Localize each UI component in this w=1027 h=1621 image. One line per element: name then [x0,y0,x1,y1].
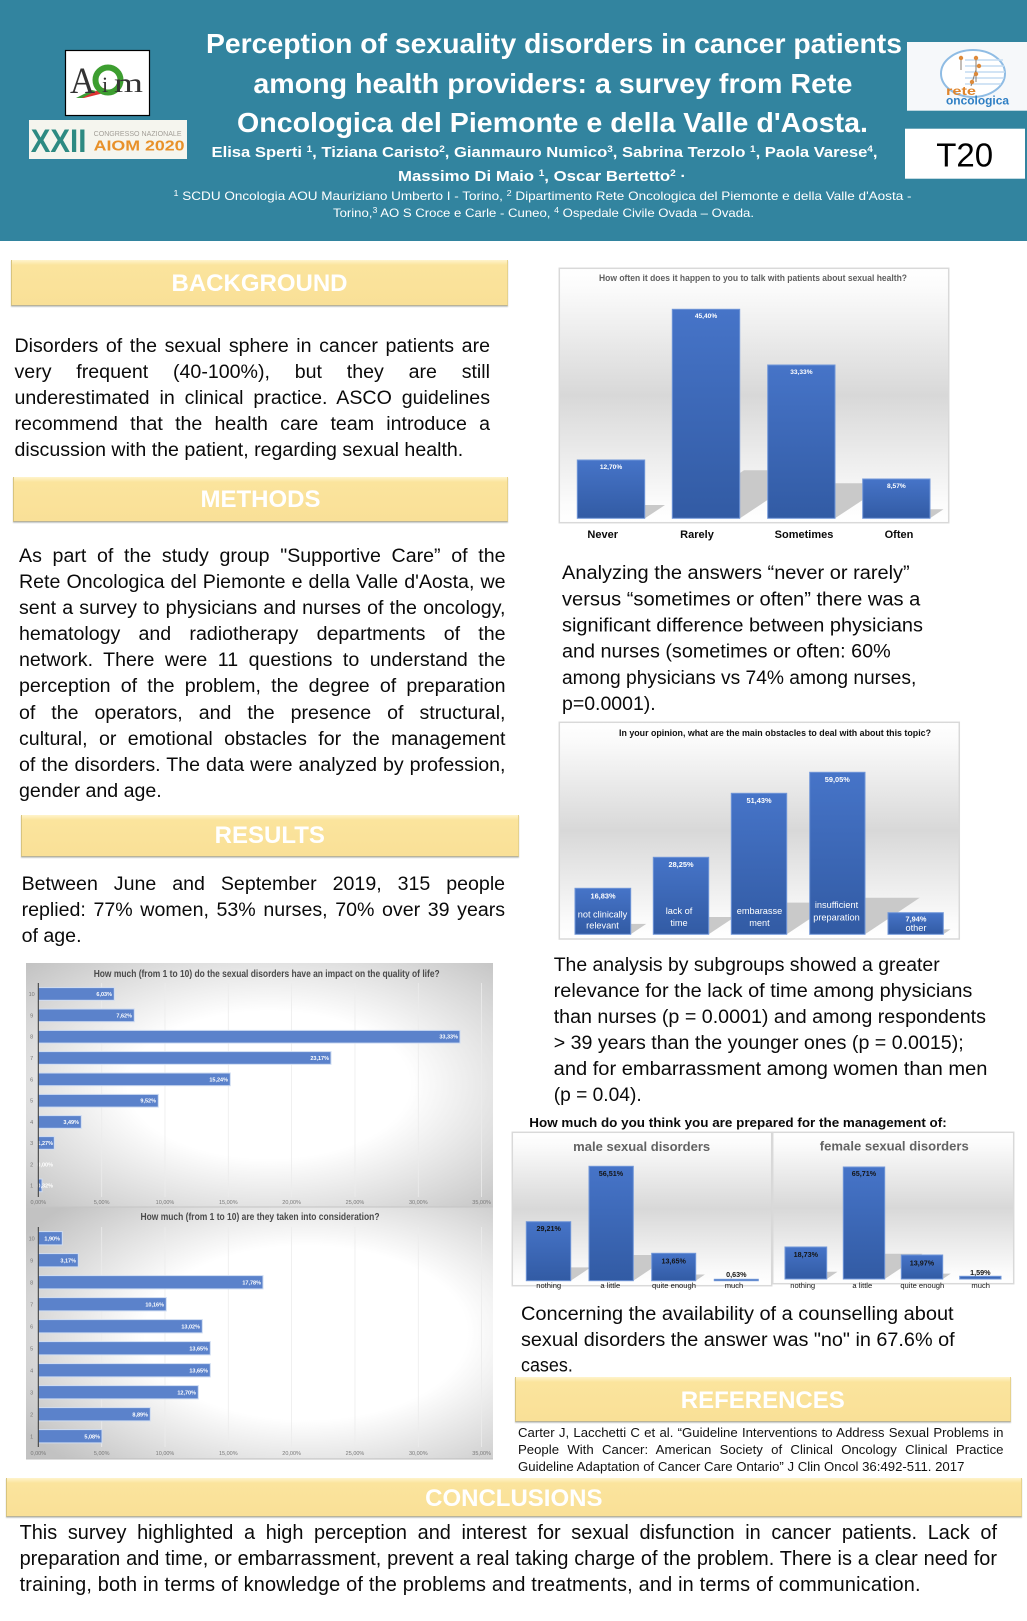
chart: male sexual disorders: male sexual disorders [573,1140,710,1154]
chart: main obstacles: 16,83% [590,891,616,900]
chart: how often talk about sexual health: 45,40% [695,313,717,320]
text: subgroup analysis [554,954,987,1106]
chart: taken into consideration: 13,65% [189,1368,208,1374]
text: never or rarely analysis: and nurses (sometimes or often: 60% [562,641,891,663]
logo: rete oncologica: oncologica [946,94,1009,108]
chart: female sexual disorders [773,1132,1014,1290]
chart: how often talk about sexual health [559,268,949,541]
chart: impact on quality of life: How much (from 1 to 10) do the sexual disorders have an impact on the quality of life? [94,969,440,980]
chart: female sexual disorders: a little [852,1281,872,1290]
chart: impact on quality of life: 3,49% [63,1120,79,1126]
authors: , [873,144,878,161]
text: background: very frequent (40-100%), but they are still [14,361,490,383]
logo: AIOM: A [70,61,95,102]
chart: taken into consideration: 5,00% [94,1451,110,1457]
heading: results: RESULTS [215,822,325,849]
chart: how often talk about sexual health: 33,33% [790,369,813,376]
authors: , Sabrina Terzolo [613,144,750,161]
heading: background: BACKGROUND [172,270,348,297]
text: never or rarely analysis: Analyzing the answers “never or rarely” [562,562,910,584]
chart: impact on quality of life: 0,32% [37,1183,53,1189]
authors: 1 [539,168,544,178]
chart: impact on quality of life: 2 [30,1162,33,1168]
chart: male sexual disorders: much [725,1281,743,1290]
chart: impact on quality of life: 23,17% [310,1056,329,1062]
text: never or rarely analysis: p=0.0001). [562,693,656,715]
text: methods: sent a survey to physicians and nurses of the oncology, [19,597,506,619]
authors: 1 [307,144,312,154]
logo: AIOM [66,50,150,116]
chart: female sexual disorders: female sexual disorders [820,1140,969,1154]
chart: impact on quality of life: 0,00% [30,1200,46,1206]
chart: impact on quality of life [26,963,493,1207]
chart: female sexual disorders: much [971,1281,990,1290]
chart: taken into consideration: 13,02% [181,1324,200,1330]
chart: main obstacles: insufficient [815,900,859,910]
chart: main obstacles: 59,05% [825,775,850,784]
authors: 3 [607,144,613,154]
chart: main obstacles: not clinically [578,909,628,919]
text: subgroup analysis: The analysis by subgroups showed a greater [554,954,940,976]
chart: how often talk about sexual health: Sometimes [775,529,833,541]
chart: male sexual disorders: 29,21% [537,1224,561,1233]
chart: main obstacles: ment [749,918,770,928]
text: subgroup analysis: relevance for the lack of time among physicians [554,980,973,1002]
title: Oncologica del Piemonte e della Valle d'Aosta. [237,107,868,138]
text: methods: As part of the study group "Supportive Care” of the [19,545,506,567]
text: methods: cultural, or emotional obstacles for the management [19,728,506,750]
text: never or rarely analysis [562,562,923,715]
authors: · [676,168,686,185]
chart: taken into consideration: 1 [30,1434,33,1440]
chart: impact on quality of life: 7 [30,1056,33,1062]
title: Perception of sexuality disorders in cancer patients [206,28,902,59]
text: methods: hematology and radiotherapy departments of the [19,623,506,645]
chart: female sexual disorders: nothing [790,1281,815,1290]
text: methods: perception of the problem, the degree of preparation [19,675,506,697]
chart: taken into consideration [26,1207,493,1459]
chart: main obstacles: other [906,923,926,933]
chart: main obstacles: preparation [813,912,860,922]
chart: impact on quality of life: 8 [30,1035,33,1041]
chart: taken into consideration: 15,00% [219,1451,238,1457]
affiliations: Torino, [333,206,369,220]
text: counselling availability: cases. [521,1355,573,1377]
chart: male sexual disorders: 0,63% [726,1270,747,1279]
chart: taken into consideration: 20,00% [282,1451,301,1457]
heading: results [21,815,519,857]
text: subgroup analysis: > 39 years than the younger ones (p = 0.0015); [554,1032,964,1054]
chart: female sexual disorders: 65,71% [852,1169,877,1178]
chart: taken into consideration: 12,70% [177,1390,196,1396]
chart: main obstacles: 28,25% [668,860,694,869]
chart: impact on quality of life: 35,00% [472,1200,491,1206]
chart: male sexual disorders: quite enough [652,1281,696,1290]
authors: Massimo Di Maio [398,168,520,185]
chart: impact on quality of life: 25,00% [346,1200,364,1206]
chart: taken into consideration: 5 [30,1346,33,1352]
text: conclusions [20,1522,998,1596]
text: references: Guideline Adaptation of Cancer Care Ontario” J Clin Oncol 36:492-511. 2017 [518,1459,964,1474]
chart: taken into consideration: 4 [30,1368,33,1374]
text: results: Between June and September 2019, 315 people [22,873,505,895]
text: references: Carter J, Lacchetti C et al. “Guideline Interventions to Address Sexual Problems in [518,1425,1004,1440]
chart: taken into consideration: 10,00% [156,1451,174,1457]
chart: taken into consideration: 10,16% [145,1302,164,1308]
heading: methods [13,477,508,522]
chart: impact on quality of life: 5 [30,1099,33,1105]
chart: impact on quality of life: 15,00% [219,1200,238,1206]
authors: , Oscar Bertetto [544,168,670,185]
heading: references: REFERENCES [681,1387,845,1414]
chart: impact on quality of life: 3 [30,1141,33,1147]
chart: how often talk about sexual health: How often it does it happen to you to talk with patients about sexual health? [599,273,907,283]
chart: how often talk about sexual health: 12,70% [600,464,622,471]
chart: main obstacles: time [670,918,688,928]
chart: male sexual disorders: 13,65% [662,1256,686,1265]
chart: female sexual disorders: 18,73% [794,1250,819,1259]
text: background: Disorders of the sexual sphere in cancer patients are [14,335,490,357]
heading: conclusions [6,1478,1022,1517]
affiliations: 1 [174,189,179,198]
text: methods: of the disorders. The data were analyzed by profession, [19,754,506,776]
text: counselling availability [521,1303,955,1377]
chart: taken into consideration: 13,65% [189,1346,208,1352]
chart: impact on quality of life: 6 [30,1077,33,1083]
text: never or rarely analysis: among physicians vs 74% among nurses, [562,667,916,689]
text: methods [19,545,506,802]
chart: how often talk about sexual health: 8,57% [887,483,906,490]
chart: main obstacles: In your opinion, what are the main obstacles to deal with about this topic? [619,728,931,738]
chart: main obstacles: 7,94% [906,915,927,924]
chart: taken into consideration: 30,00% [409,1451,428,1457]
chart: female sexual disorders: 13,97% [910,1258,935,1267]
chart: taken into consideration: 25,00% [346,1451,364,1457]
chart: main obstacles: lack of [666,906,693,916]
chart: impact on quality of life: 10 [29,992,35,998]
chart: how often talk about sexual health: Never [587,529,619,541]
affiliations: Ospedale Civile Ovada – Ovada. [559,206,754,220]
chart: taken into consideration: 9 [30,1258,33,1264]
affiliations: Dipartimento Rete Oncologica del Piemonte e della Valle d'Aosta - [512,189,912,203]
chart: impact on quality of life: 1 [30,1183,33,1189]
chart: how often talk about sexual health: Often [885,529,914,541]
text: results: replied: 77% women, 53% nurses, 70% over 39 years [22,899,505,921]
chart: male sexual disorders: a little [600,1281,620,1290]
text: methods: of the operators, and the presence of structural, [19,702,506,724]
chart: taken into consideration: 3 [30,1390,33,1396]
logo: XXII congresso AIOM 2020: XXII [31,123,86,159]
text: conclusions: This survey highlighted a high perception and interest for sexual disfunction in cancer patients. Lack of [20,1522,997,1544]
chart: taken into consideration: 8 [30,1280,33,1286]
logo: rete oncologica: rete [946,86,976,98]
chart: impact on quality of life: 10,00% [156,1200,174,1206]
chart: main obstacles [559,722,959,939]
chart: impact on quality of life: 5,00% [94,1200,110,1206]
text: references: People With Cancer: American Society of Clinical Oncology Clinical Practice [518,1442,1004,1457]
chart: impact on quality of life: 33,33% [439,1035,458,1041]
affiliations: 3 [372,206,378,215]
text: subgroup analysis: and for embarrassment among women than men [554,1058,987,1080]
authors: 2 [439,144,445,154]
chart: taken into consideration: 1,90% [44,1236,60,1242]
text: never or rarely analysis: significant difference between physicians [562,614,923,636]
chart: impact on quality of life: 30,00% [409,1200,428,1206]
title: among health providers: a survey from Rete [253,68,852,99]
logo: XXII congresso AIOM 2020: AIOM 2020 [94,138,185,154]
chart: main obstacles: 51,43% [746,796,772,805]
authors: 4 [867,144,873,154]
chart: impact on quality of life: 20,00% [282,1200,301,1206]
chart: taken into consideration: 2 [30,1412,33,1418]
chart: taken into consideration: 0,00% [30,1451,46,1457]
title [206,28,902,138]
text: counselling availability: Concerning the availability of a counselling about [521,1303,954,1325]
text: background: discussion with the patient, regarding sexual health. [14,439,463,461]
affiliations [174,189,912,220]
text: methods: network. There were 11 questions to understand the [19,649,506,671]
badge: T20 [905,129,1025,179]
chart: main obstacles: relevant [586,920,619,930]
text: results: of age. [22,925,82,947]
chart: taken into consideration: 8,89% [132,1412,148,1418]
chart: taken into consideration: How much (from 1 to 10) are they taken into consideration? [140,1212,380,1223]
chart: taken into consideration: 35,00% [472,1451,491,1457]
heading: references [515,1377,1010,1422]
heading: background [11,260,508,306]
affiliations: SCDU Oncologia AOU Mauriziano Umberto I - Torino, [179,189,507,203]
chart: taken into consideration: 6 [30,1324,33,1330]
header banner [0,0,1027,241]
chart: taken into consideration: 10 [29,1236,35,1242]
chart: female sexual disorders: quite enough [900,1281,944,1290]
chart: impact on quality of life: 7,62% [116,1013,132,1019]
affiliations: AO S Croce e Carle - Cuneo, [377,206,554,220]
chart: impact on quality of life: 6,03% [96,992,112,998]
badge: T20: T20 [936,136,993,174]
chart: impact on quality of life: 1,27% [37,1141,53,1147]
text: background [14,335,490,461]
text: background: recommend that the health care team introduce a [14,413,490,435]
authors [212,144,878,185]
text: methods: gender and age. [19,780,162,802]
logo: XXII congresso AIOM 2020: CONGRESSO NAZIONALE [94,131,182,138]
chart: main obstacles: embarasse [737,906,782,916]
chart: taken into consideration: 5,08% [84,1434,100,1440]
text: conclusions: training, both in terms of knowledge of the problems and treatments, and in terms of communication. [20,1574,921,1596]
text: subgroup analysis: than nurses (p = 0.0001) and among respondents [554,1006,986,1028]
chart: male sexual disorders: 56,51% [599,1169,624,1178]
chart: impact on quality of life: 4 [30,1120,33,1126]
affiliations: 4 [554,206,560,215]
chart: taken into consideration: 3,17% [60,1258,76,1264]
affiliations: 2 [507,189,512,198]
text: references [518,1425,1004,1474]
authors: 1 [750,144,756,154]
logo: AIOM: m [114,68,143,98]
logo: rete oncologica [907,42,1027,111]
authors: , Paola Varese [756,144,867,161]
heading: methods: METHODS [200,486,320,513]
chart: female sexual disorders: 1,59% [970,1268,991,1277]
authors: , Gianmauro Numico [445,144,607,161]
logo: AIOM: i [102,72,108,97]
text: counselling availability: sexual disorders the answer was "no" in 67.6% of [521,1329,955,1351]
chart: impact on quality of life: 9,52% [140,1099,156,1105]
chart: male sexual disorders: nothing [536,1281,561,1290]
chart: male sexual disorders [512,1132,772,1290]
heading: conclusions: CONCLUSIONS [425,1485,602,1512]
text: conclusions: preparation and time, or embarrassment, prevent a real taking charge of the problem. There is a clear need for [20,1548,997,1570]
chart: impact on quality of life: 9 [30,1013,33,1019]
text: methods: Rete Oncologica del Piemonte e della Valle d'Aosta, we [19,571,506,593]
text: results [22,873,505,947]
chart: taken into consideration: 17,78% [242,1280,261,1286]
text: subgroup analysis: (p = 0.04). [554,1084,642,1106]
text: background: underestimated in clinical practice. ASCO guidelines [14,387,490,409]
chart: impact on quality of life: 0,00% [37,1162,53,1168]
authors: 2 [670,168,676,178]
text: never or rarely analysis: versus “sometimes or often” there was a [562,588,920,610]
logo: XXII congresso AIOM 2020 [29,120,187,159]
authors: Elisa Sperti [212,144,293,161]
heading: prepared for the management: How much do you think you are prepared for the management of: [529,1115,947,1130]
authors: , Tiziana Caristo [312,144,439,161]
chart: taken into consideration: 7 [30,1302,33,1308]
chart: how often talk about sexual health: Rarely [680,529,715,541]
chart: impact on quality of life: 15,24% [209,1077,228,1083]
